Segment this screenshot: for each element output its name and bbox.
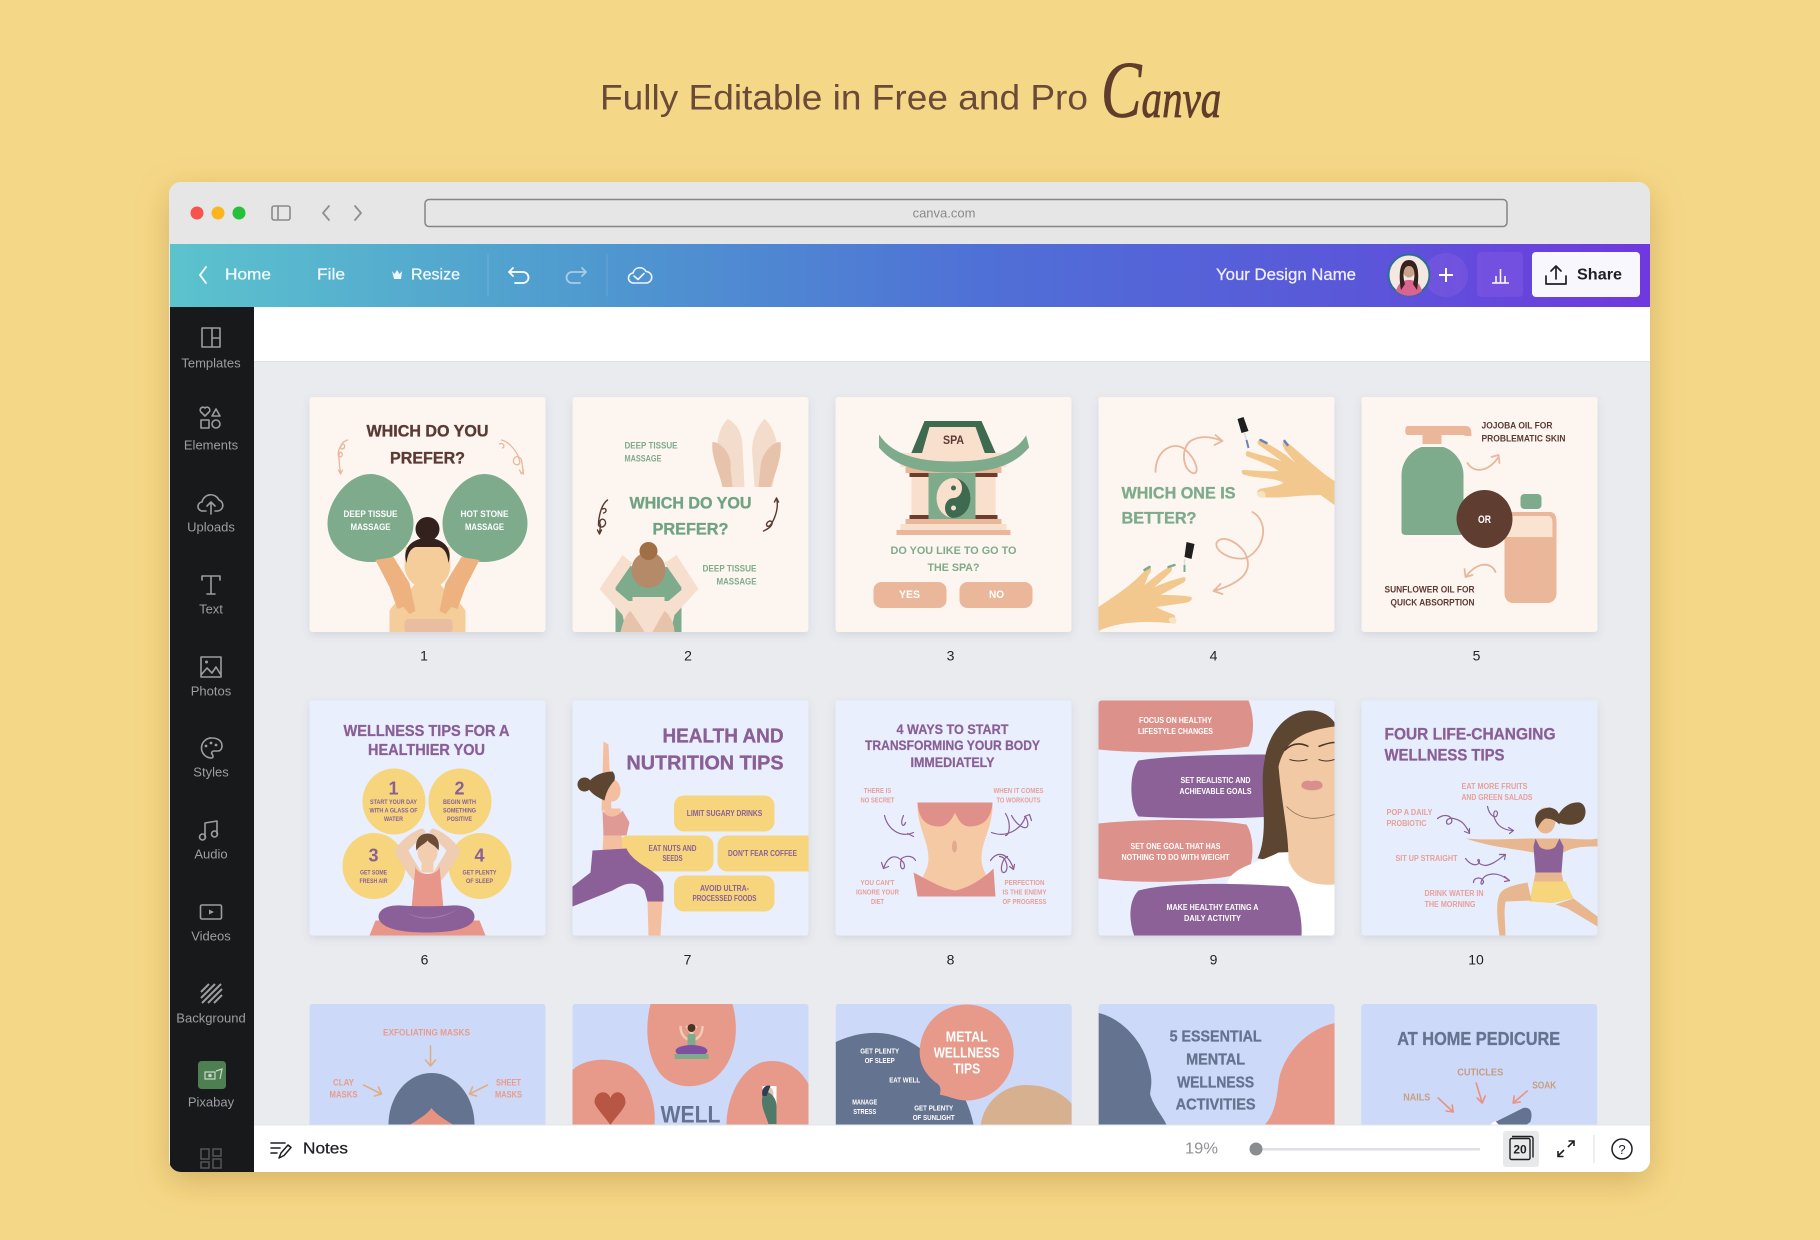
panel: card 1 which do you prefer: MASSAGE <box>465 522 504 532</box>
panel: card 11 masks: SHEET <box>496 1078 521 1088</box>
nav: uploads <box>187 495 235 534</box>
nav: text: Text <box>199 602 223 616</box>
panel: card 6 wellness tips <box>310 700 546 936</box>
panel: card 14 essential activities: MENTAL <box>1186 1052 1245 1068</box>
panel: card 1 which do you prefer: MASSAGE <box>350 522 390 532</box>
panel: card 5 oils: QUICK ABSORPTION <box>1390 598 1475 608</box>
panel: card 9 healthy lifestyle changes: SET ONE GOAL THAT HAS <box>1130 842 1221 851</box>
icon: fullscreen <box>1558 1141 1574 1156</box>
panel: card 11 masks: EXFOLIATING MASKS <box>383 1028 470 1038</box>
panel: card 9 healthy lifestyle changes: LIFESTYLE CHANGES <box>1138 727 1214 736</box>
panel: card 8 four ways: TRANSFORMING YOUR BODY <box>865 738 1040 753</box>
panel: card 13 mental wellness tips: GET PLENTY <box>860 1046 899 1056</box>
icon: back chevron <box>200 267 206 283</box>
panel: card 2 which do you prefer: MASSAGE <box>624 454 662 464</box>
panel: card 14 essential activities: 5 ESSENTIAL <box>1170 1028 1262 1046</box>
panel: card 14 essential activities: ACTIVITIES <box>1176 1096 1256 1114</box>
page numbers: 5 <box>1473 648 1481 664</box>
panel: card 6 wellness tips: WITH A GLASS OF <box>370 808 418 814</box>
panel: card 13 mental wellness tips <box>836 1004 1072 1239</box>
nav: photos <box>191 657 232 698</box>
panel: card 2 which do you prefer: MASSAGE <box>716 576 756 588</box>
panel: card 2 which do you prefer: WHICH DO YOU <box>630 494 752 512</box>
panel: card 6 wellness tips: BEGIN WITH <box>443 799 476 806</box>
panel: card 1 which do you prefer: DEEP TISSUE <box>344 509 398 519</box>
page numbers: 7 <box>684 952 692 968</box>
panel: card 5 oils: SUNFLOWER OIL FOR <box>1384 584 1475 596</box>
panel: card 6 wellness tips: FRESH AIR <box>360 878 388 885</box>
panel: card 4 which one is better: WHICH ONE IS <box>1122 484 1236 502</box>
panel: card 15 at home pedicure: NAILS <box>1403 1092 1430 1104</box>
Canva logo wordmark: Canva <box>1101 47 1221 135</box>
panel: card 7 health and nutrition tips: DON'T FEAR COFFEE <box>728 849 798 858</box>
panel: card 6 wellness tips: HEALTHIER YOU <box>368 742 485 759</box>
panel: card 12 well: WELL <box>660 1102 720 1128</box>
panel: card 10 four life-changing wellness tips: DRINK WATER IN <box>1424 889 1484 898</box>
toolbar menu items <box>226 268 460 280</box>
panel: card 13 mental wellness tips: OF SUNLIGHT <box>913 1113 955 1122</box>
panel: card 12 well <box>572 1004 808 1124</box>
panel: card 10 four life-changing wellness tips: FOUR LIFE-CHANGING <box>1384 726 1556 744</box>
nav: background <box>176 984 246 1026</box>
nav: templates <box>181 328 241 370</box>
panel: card 10 four life-changing wellness tips: AND GREEN SALADS <box>1462 793 1533 802</box>
share button: Share <box>1577 266 1622 284</box>
panel: card 1 which do you prefer: PREFER? <box>390 448 465 468</box>
nav: templates: Templates <box>181 356 241 370</box>
panel: card 10 four life-changing wellness tips: PROBIOTIC <box>1386 819 1427 828</box>
panel: card 10 four life-changing wellness tips: EAT MORE FRUITS <box>1462 782 1528 791</box>
page numbers: 9 <box>1210 952 1218 968</box>
panel: card 1 which do you prefer <box>310 397 546 633</box>
panel: card 1 which do you prefer: HOT STONE <box>460 509 508 519</box>
page numbers: 6 <box>421 952 429 968</box>
panel: card 6 wellness tips: 2 <box>454 778 465 798</box>
panel: card 9 healthy lifestyle changes <box>1098 700 1334 936</box>
page numbers <box>420 648 1484 968</box>
panel: card 10 four life-changing wellness tips: THE MORNING <box>1424 900 1476 909</box>
icon: undo <box>509 268 528 283</box>
page count button <box>1503 1131 1539 1167</box>
panel: card 11 masks: CLAY <box>333 1078 355 1088</box>
panel: card 6 wellness tips: 1 <box>388 778 399 798</box>
panel: card 8 four ways <box>836 700 1072 936</box>
panel: card 13 mental wellness tips: EAT WELL <box>889 1076 921 1084</box>
panel: card 15 at home pedicure: AT HOME PEDICURE <box>1397 1029 1560 1049</box>
page count button: 20 <box>1513 1142 1527 1156</box>
panel: card 9 healthy lifestyle changes: NOTHING TO DO WITH WEIGHT <box>1122 853 1230 862</box>
panel: card 5 oils: JOJOBA OIL FOR <box>1482 420 1553 432</box>
nav: elements: Elements <box>184 438 239 452</box>
panel: card 8 four ways: NO SECRET <box>860 798 895 804</box>
panel: card 7 health and nutrition tips: SEEDS <box>662 854 683 863</box>
icon: meditating figure <box>674 1024 708 1059</box>
nav: text <box>199 576 223 616</box>
title: Fully Editable in Free and Pro <box>600 78 1088 118</box>
panel: card 15 at home pedicure: CUTICLES <box>1457 1068 1504 1078</box>
panel: card 8 four ways: DIET <box>871 899 885 906</box>
page numbers: 4 <box>1210 648 1218 664</box>
panel: card 2 which do you prefer: DEEP TISSUE <box>624 440 678 452</box>
bottom status bar: 19% <box>1185 1140 1218 1158</box>
panel: card 7 health and nutrition tips: AVOID ULTRA- <box>700 884 749 893</box>
page numbers: 2 <box>684 648 692 664</box>
toolbar menu items: Resize <box>411 266 460 284</box>
panel: card 1 which do you prefer: WHICH DO YOU <box>366 422 488 440</box>
panel: card 8 four ways: IS THE ENEMY <box>1002 890 1047 896</box>
nav: pixabay <box>188 1061 235 1110</box>
panel: card 13 mental wellness tips: GET PLENTY <box>914 1104 953 1112</box>
panel: card 4 which one is better: BETTER? <box>1122 508 1196 528</box>
address bar <box>425 200 1507 226</box>
panel: card 10 four life-changing wellness tips: SIT UP STRAIGHT <box>1396 854 1458 863</box>
panel: card 13 mental wellness tips: OF SLEEP <box>865 1056 895 1065</box>
page numbers: 1 <box>420 648 428 664</box>
icon: notes <box>271 1143 291 1158</box>
panel: card 7 health and nutrition tips <box>572 700 818 936</box>
nav: pixabay: Pixabay <box>188 1094 235 1110</box>
panel: card 6 wellness tips: POSITIVE <box>447 816 473 823</box>
panel: card 8 four ways: WHEN IT COMES <box>994 788 1044 795</box>
panel: card 14 essential activities: WELLNESS <box>1177 1074 1254 1092</box>
top white strip <box>254 307 1650 362</box>
panel: card 3 spa temple: YES <box>899 589 920 601</box>
panel: card 9 healthy lifestyle changes: ACHIEVABLE GOALS <box>1180 787 1252 796</box>
panel: card 10 four life-changing wellness tips: WELLNESS TIPS <box>1384 746 1504 764</box>
panel: card 13 mental wellness tips: WELLNESS <box>934 1044 1000 1062</box>
panel: card 6 wellness tips: WATER <box>384 816 403 823</box>
icon: sidebar toggle <box>272 206 290 220</box>
temple: SPA <box>943 433 964 447</box>
panel: card 8 four ways: TO WORKOUTS <box>996 798 1041 804</box>
panel: card 10 four life-changing wellness tips: POP A DAILY <box>1386 808 1433 817</box>
page numbers: 3 <box>947 648 955 664</box>
icon: redo <box>566 268 586 283</box>
bottom status bar <box>254 1125 1650 1172</box>
left sidebar <box>170 307 254 1172</box>
toolbar menu items: File <box>317 266 345 284</box>
nav: uploads: Uploads <box>187 520 235 534</box>
panel: card 11 masks: MASKS <box>495 1090 522 1100</box>
panel: card 6 wellness tips: 4 <box>474 846 485 866</box>
panel: card 2 which do you prefer: DEEP TISSUE <box>702 564 756 574</box>
bottom status bar: Notes <box>303 1140 348 1158</box>
nav: audio <box>194 821 228 862</box>
panel: card 5 oils: PROBLEMATIC SKIN <box>1482 434 1566 444</box>
panel: card 9 healthy lifestyle changes: MAKE HEALTHY EATING A <box>1166 903 1259 912</box>
panel: card 8 four ways: 4 WAYS TO START <box>896 722 1009 737</box>
icon: help: ? <box>1618 1142 1626 1157</box>
panel: card 3 spa temple <box>836 397 1072 632</box>
panel: card 6 wellness tips: GET SOME <box>360 870 388 876</box>
panel: card 7 health and nutrition tips: PROCESSED FOODS <box>692 894 757 903</box>
panel: card 7 health and nutrition tips: LIMIT SUGARY DRINKS <box>687 809 763 818</box>
panel: card 8 four ways: IMMEDIATELY <box>910 755 994 770</box>
panel: card 9 healthy lifestyle changes: FOCUS ON HEALTHY <box>1139 716 1213 725</box>
panel: card 6 wellness tips: OF SLEEP <box>466 878 494 885</box>
panel: card 8 four ways: OF PROGRESS <box>1002 899 1047 906</box>
nav: audio: Audio <box>194 846 228 862</box>
nav: styles: Styles <box>193 764 229 780</box>
nav: background: Background <box>176 1010 246 1026</box>
title <box>600 47 1221 135</box>
analytics button <box>1477 252 1523 297</box>
nav: styles <box>193 738 229 780</box>
temple <box>880 421 1028 535</box>
panel: card 9 healthy lifestyle changes: SET REALISTIC AND <box>1180 776 1251 785</box>
icon: help <box>1612 1139 1632 1159</box>
panel: card 10 four life-changing wellness tips <box>1362 700 1598 936</box>
panel: card 3 spa temple: THE SPA? <box>928 562 980 574</box>
zoom slider <box>1250 1142 1480 1156</box>
figure: warrior pose woman <box>1466 802 1598 936</box>
panel: card 13 mental wellness tips: STRESS <box>853 1107 876 1116</box>
panel: card 8 four ways: THERE IS <box>864 788 892 795</box>
editor toolbar <box>170 244 1650 307</box>
nav: more apps <box>201 1149 221 1168</box>
browser title bar <box>169 182 1650 244</box>
panel: card 7 health and nutrition tips: HEALTH AND <box>662 726 784 748</box>
address bar: canva.com <box>913 206 975 220</box>
panel: card 3 spa temple: DO YOU LIKE TO GO TO <box>890 545 1017 557</box>
panel: card 5 oils: OR <box>1478 514 1491 526</box>
icon: heart <box>594 1092 626 1125</box>
design name: Your Design Name <box>1216 266 1356 284</box>
icon: sleeping figure <box>762 1085 776 1124</box>
panel: card 6 wellness tips: SOMETHING <box>443 808 476 814</box>
panel: card 11 masks <box>310 1004 546 1124</box>
nav: videos: Videos <box>191 928 231 944</box>
toolbar menu items: Home <box>225 266 271 284</box>
traffic lights <box>190 206 246 220</box>
panel: card 13 mental wellness tips: METAL <box>946 1028 988 1046</box>
panel: card 2 which do you prefer <box>572 397 808 632</box>
nav: photos: Photos <box>191 684 232 698</box>
panel: card 11 masks: MASKS <box>330 1090 358 1100</box>
panel: card 14 essential activities <box>1099 1004 1335 1239</box>
panel: card 13 mental wellness tips: MANAGE <box>852 1098 877 1106</box>
browser window <box>169 182 1650 1239</box>
panel: card 7 health and nutrition tips: EAT NUTS AND <box>648 844 697 853</box>
panel: card 13 mental wellness tips: TIPS <box>953 1060 980 1078</box>
panel: card 6 wellness tips: START YOUR DAY <box>370 799 418 806</box>
panel: card 15 at home pedicure <box>1361 1004 1597 1239</box>
figure: torso <box>914 802 996 896</box>
panel: card 15 at home pedicure: SOAK <box>1532 1080 1557 1092</box>
figure: woman with closed eyes <box>1228 710 1334 936</box>
panel: card 9 healthy lifestyle changes: DAILY ACTIVITY <box>1184 914 1242 923</box>
page numbers: 10 <box>1468 952 1484 968</box>
panel: card 8 four ways: YOU CAN'T <box>860 880 895 887</box>
panel: card 7 health and nutrition tips: NUTRITION TIPS <box>626 752 784 774</box>
figure: standing yoga woman <box>572 742 664 936</box>
icon: saved cloud <box>628 268 652 283</box>
panel: card 8 four ways: PERFECTION <box>1004 880 1044 887</box>
panel: card 6 wellness tips: WELLNESS TIPS FOR A <box>344 723 510 740</box>
panel: card 6 wellness tips: GET PLENTY <box>462 870 497 876</box>
figure: seated woman <box>370 828 486 936</box>
panel: card 8 four ways: IGNORE YOUR <box>856 890 899 896</box>
add collaborator button <box>1424 253 1468 297</box>
panel: card 4 which one is better <box>1098 397 1334 632</box>
avatar <box>1388 254 1430 296</box>
nav: videos <box>191 905 231 944</box>
icon: back and forward chevrons <box>323 206 361 220</box>
nav: elements <box>184 407 239 452</box>
panel: card 2 which do you prefer: PREFER? <box>652 520 728 538</box>
icon: crown <box>392 270 402 279</box>
panel: card 3 spa temple: NO <box>989 589 1004 601</box>
panel: card 5 oils <box>1362 397 1598 632</box>
page numbers: 8 <box>947 952 955 968</box>
share button <box>1532 252 1640 297</box>
panel: card 6 wellness tips: 3 <box>368 846 379 866</box>
